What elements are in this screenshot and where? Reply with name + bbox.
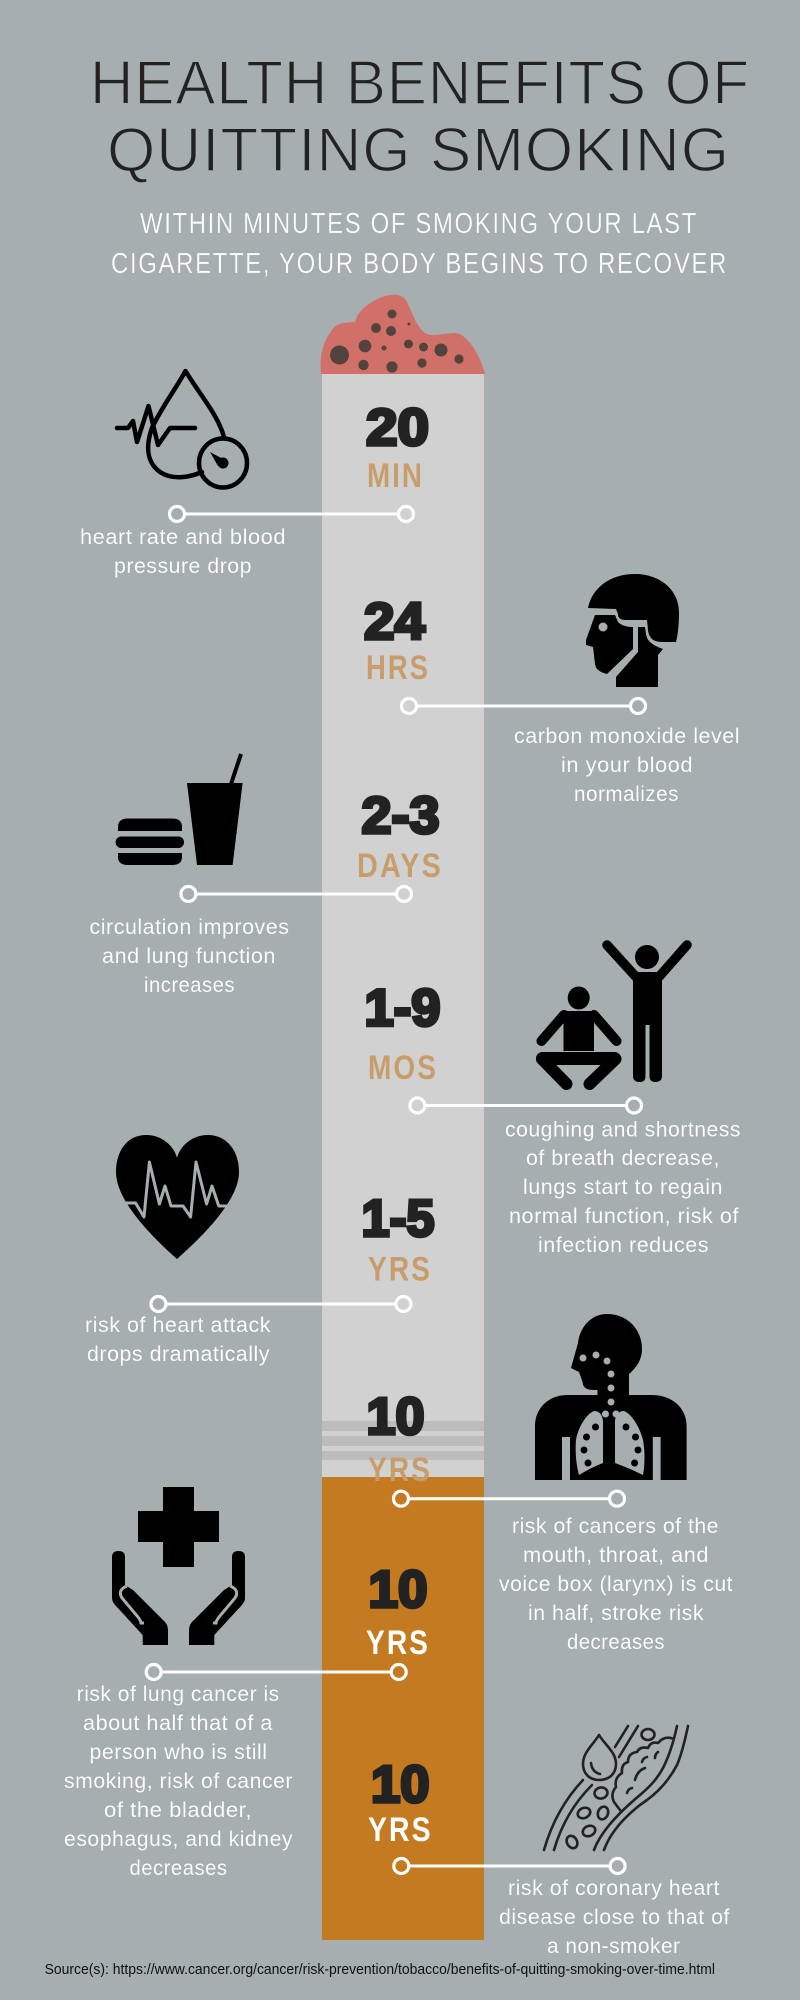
number: 1-9: 1-9 [364, 980, 440, 1038]
text: lung cancer: risk of lung cancer is [77, 1683, 280, 1706]
text: carbon monoxide: normalizes [574, 783, 679, 806]
text: heart attack: drops dramatically [87, 1343, 270, 1366]
cigarette body [322, 374, 484, 1940]
connector: 10 yrs lung cancer [146, 1664, 406, 1680]
text: cancers of the mouth: mouth, throat, and [523, 1544, 709, 1567]
text: heart attack: risk of heart attack [85, 1314, 271, 1337]
text: coughing: normal function, risk of [509, 1205, 739, 1228]
subtitle: WITHIN MINUTES OF SMOKING YOUR LAST [140, 208, 698, 240]
text: carbon monoxide [514, 725, 740, 806]
text: coronary heart disease: disease close to that of [499, 1906, 730, 1929]
text: carbon monoxide: in your blood [561, 754, 693, 777]
text: coronary heart disease [499, 1877, 730, 1958]
text: circulation: circulation improves [90, 916, 290, 939]
source line: Source(s): https://www.cancer.org/cancer/risk-prevention/tobacco/benefits-of-quitting-smoking-over-time.html [45, 1962, 715, 1978]
title [90, 49, 750, 185]
label: MIN: MIN [367, 457, 424, 495]
icon: blood pressure drop [117, 371, 247, 488]
text: circulation: increases [144, 974, 235, 997]
label: HRS: HRS [366, 649, 430, 687]
cigarette ember [321, 295, 485, 374]
number: 20: 20 [366, 399, 429, 457]
icon: exercising people [536, 945, 687, 1084]
number: 2-3: 2-3 [362, 787, 440, 845]
connector: 2-3 days [181, 886, 412, 902]
text: heart rate: pressure drop [114, 555, 252, 578]
title: HEALTH BENEFITS OF [90, 49, 750, 118]
icon: heart with pulse [116, 1135, 239, 1259]
number: 24: 24 [364, 593, 425, 651]
connector: 10 yrs coronary [394, 1858, 625, 1874]
text: cancers of the mouth: decreases [567, 1631, 665, 1654]
icon: artery with plaque [544, 1726, 688, 1850]
label: YRS (lung cancer): YRS [366, 1624, 430, 1662]
text: cancers of the mouth: in half, stroke risk [528, 1602, 704, 1625]
text: coronary heart disease: risk of coronary heart [508, 1877, 720, 1900]
connector: 20 min [170, 506, 414, 522]
text: cancers of the mouth: voice box (larynx) is cut [499, 1573, 733, 1596]
text: heart attack [85, 1314, 271, 1366]
text: coronary heart disease: a non-smoker [547, 1935, 680, 1958]
text: heart rate: heart rate and blood [80, 526, 286, 549]
text: coughing: lungs start to regain [523, 1176, 723, 1199]
label: DAYS: DAYS [357, 847, 443, 885]
icon: body with lungs [535, 1314, 687, 1480]
text: circulation: and lung function [102, 945, 276, 968]
number: 10 (coronary): 10 [371, 1756, 430, 1814]
icon: hands holding cross [112, 1487, 245, 1645]
text: coughing: coughing and shortness [505, 1118, 741, 1142]
text: cancers of the mouth: risk of cancers of the [512, 1515, 719, 1538]
text: lung cancer: esophagus, and kidney [64, 1828, 293, 1851]
text: coughing [505, 1118, 741, 1257]
connector: 1-5 yrs [151, 1296, 411, 1312]
text: lung cancer: of the bladder, [104, 1799, 252, 1822]
number: 10 (lung cancer): 10 [368, 1561, 428, 1619]
connector: 24 hrs [402, 698, 646, 714]
connector: 10 yrs larynx [394, 1491, 624, 1506]
text: carbon monoxide: carbon monoxide level [514, 725, 740, 748]
text: circulation [90, 916, 290, 997]
text: coughing: infection reduces [538, 1234, 709, 1257]
text: lung cancer [64, 1683, 293, 1880]
text: lung cancer: smoking, risk of cancer [64, 1770, 293, 1793]
text: lung cancer: about half that of a [83, 1712, 273, 1735]
text: lung cancer: person who is still [90, 1741, 268, 1764]
label: YRS: YRS [368, 1250, 432, 1288]
connector: 1-9 mos [410, 1098, 642, 1113]
icon: burger and drink [116, 754, 243, 865]
text: heart rate [80, 526, 286, 578]
text: lung cancer: decreases [130, 1857, 228, 1880]
label: YRS (coronary): YRS [368, 1811, 433, 1849]
title: QUITTING SMOKING [107, 116, 730, 185]
label: MOS: MOS [368, 1049, 438, 1087]
number: 1-5: 1-5 [362, 1190, 434, 1248]
icon: head with helmet [586, 574, 679, 687]
number: 10 (grey section): 10 [366, 1388, 424, 1446]
text: coughing: of breath decrease, [526, 1147, 720, 1170]
subtitle [111, 208, 728, 280]
label: YRS (grey section): YRS [368, 1451, 432, 1489]
text: cancers of the mouth [499, 1515, 733, 1654]
